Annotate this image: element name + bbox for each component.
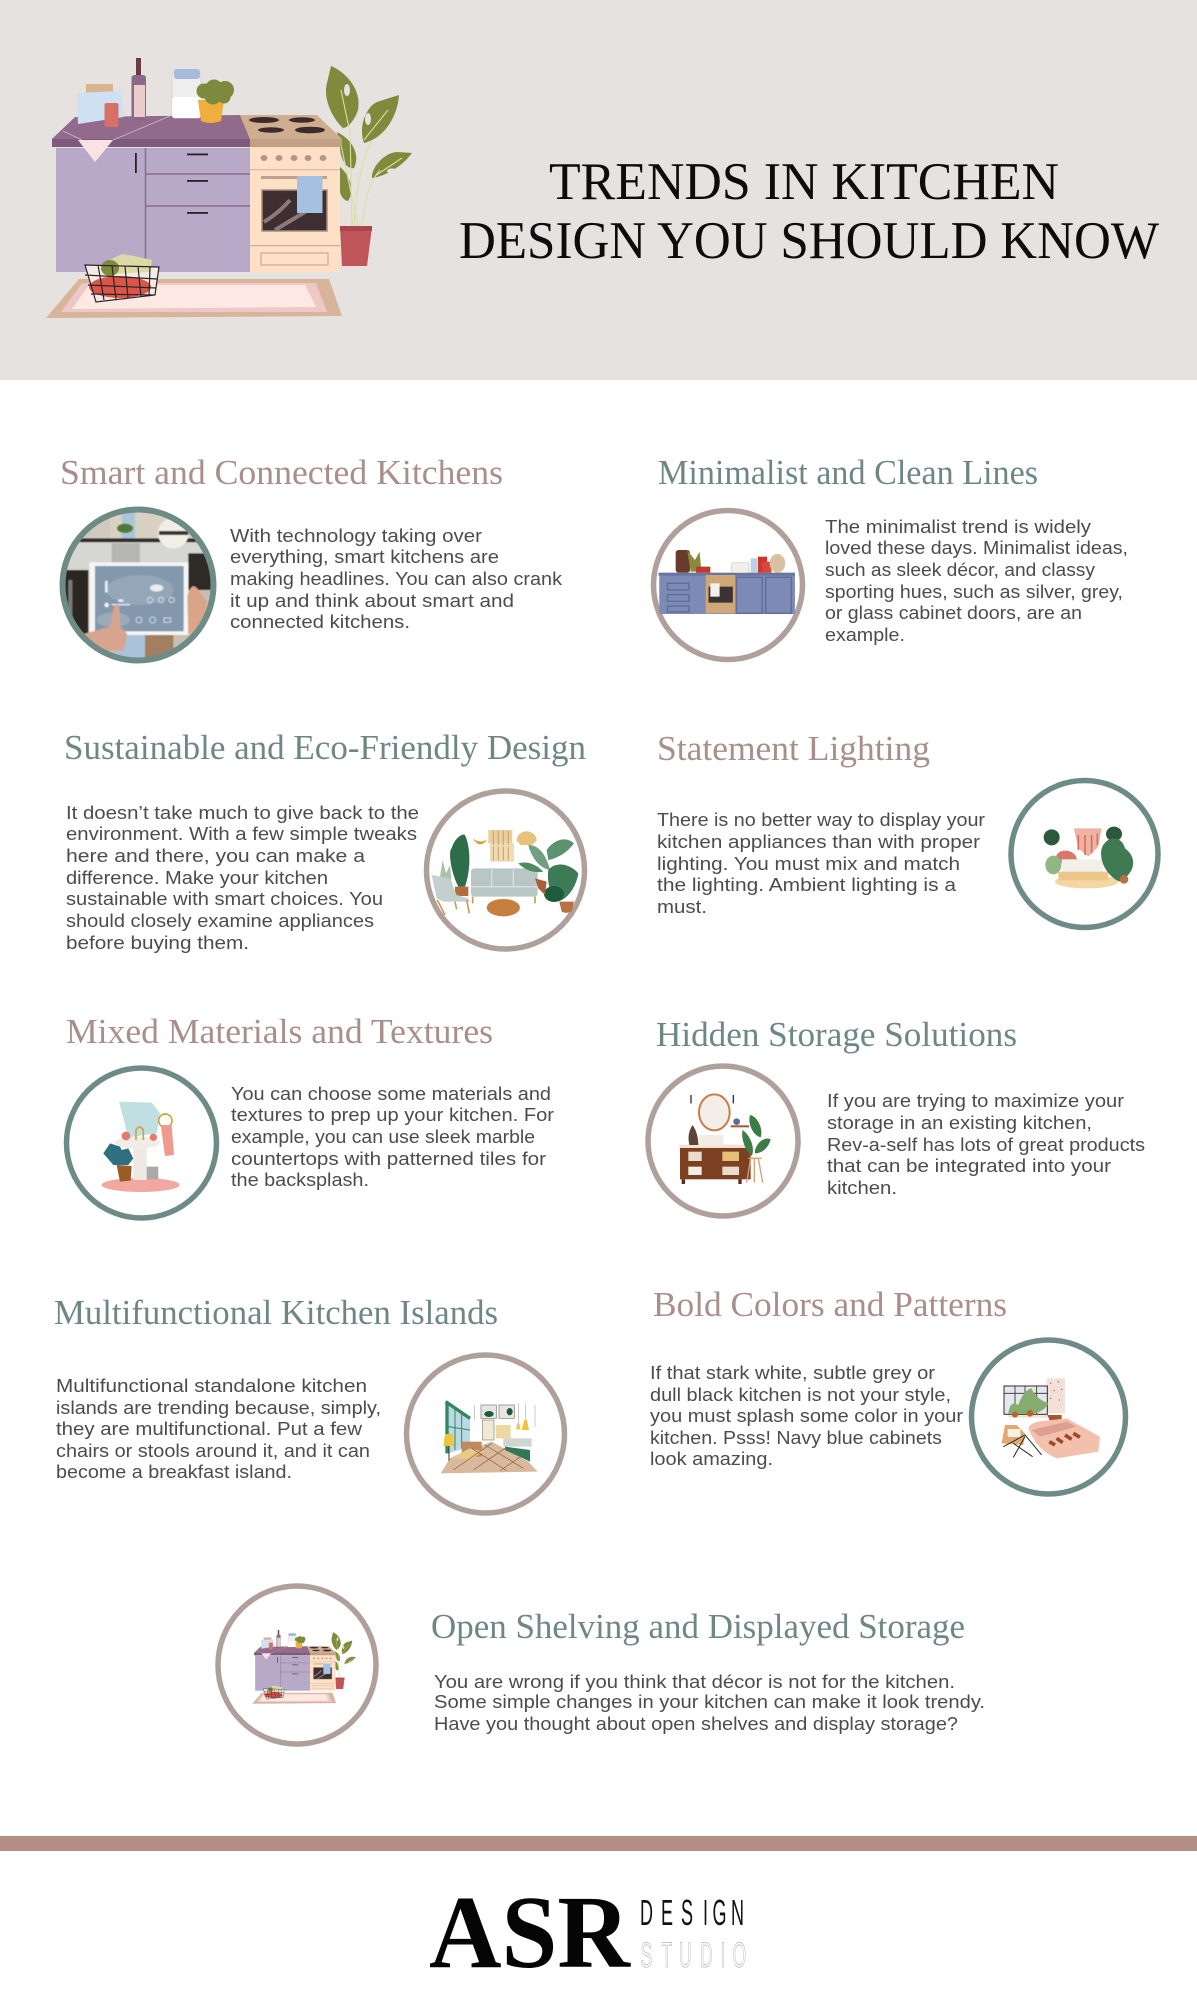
icon: tablet photo circle: [57, 503, 220, 667]
text block: kitchen.: [827, 1178, 897, 1198]
text block: become a breakfast island.: [56, 1462, 292, 1482]
text block: example, you can use sleek marble: [231, 1127, 535, 1147]
text block: countertops with patterned tiles for: [231, 1149, 546, 1169]
panel: hidden storage solutions: [648, 1015, 1145, 1216]
text block: environment. With a few simple tweaks: [66, 824, 417, 844]
icon: bedroom with plants circle: [1011, 780, 1158, 928]
text block: that can be integrated into your: [827, 1156, 1111, 1176]
text block: Have you thought about open shelves and display storage?: [434, 1714, 958, 1734]
text block: You are wrong if you think that décor is not for the kitchen.: [434, 1672, 955, 1692]
text block: If that stark white, subtle grey or: [650, 1363, 935, 1383]
panel: bold colors and patterns: [650, 1285, 1126, 1494]
text block: [230, 526, 563, 632]
panel: statement lighting: [657, 729, 1158, 928]
text block: everything, smart kitchens are: [230, 547, 499, 567]
text block: it up and think about smart and: [230, 591, 514, 611]
text block: If you are trying to maximize your: [827, 1091, 1124, 1111]
heading: Sustainable and Eco-Friendly Design: [64, 728, 586, 767]
heading: Smart and Connected Kitchens: [60, 453, 503, 492]
icon: blue kitchen circle: [654, 510, 802, 660]
heading: Statement Lighting: [657, 729, 930, 768]
text block: should closely examine appliances: [66, 911, 374, 931]
text block: connected kitchens.: [230, 612, 410, 632]
text block: the backsplash.: [231, 1170, 369, 1190]
text block: storage in an existing kitchen,: [827, 1113, 1092, 1133]
text block: kitchen appliances than with proper: [657, 832, 980, 852]
icon: wooden vanity circle: [648, 1066, 798, 1216]
icon: sink circle: [66, 1068, 216, 1218]
text block: difference. Make your kitchen: [66, 868, 328, 888]
icon: open-plan interior circle: [406, 1355, 564, 1513]
text block: sustainable with smart choices. You: [66, 889, 383, 909]
text block: Rev-a-self has lots of great products: [827, 1135, 1145, 1155]
text block: chairs or stools around it, and it can: [56, 1441, 370, 1461]
panel: minimalist and clean lines: [654, 453, 1128, 660]
text block: [231, 1084, 554, 1190]
panel: mixed materials and textures: [66, 1012, 554, 1218]
logo: STUDIO: [640, 1935, 746, 1975]
icon: kitchen illustration: [46, 58, 412, 318]
heading: Bold Colors and Patterns: [653, 1285, 1007, 1324]
text block: before buying them.: [66, 933, 249, 953]
header banner: [0, 0, 1197, 380]
text block: or glass cabinet doors, are an: [825, 603, 1082, 623]
text block: sporting hues, such as silver, grey,: [825, 582, 1123, 602]
text block: islands are trending because, simply,: [56, 1398, 381, 1418]
panel: open shelving and displayed storage: [218, 1586, 985, 1744]
text block: [825, 517, 1128, 645]
title: [459, 153, 1159, 270]
panel: sustainable and eco-friendly design: [64, 728, 586, 953]
text block: textures to prep up your kitchen. For: [231, 1105, 554, 1125]
text block: here and there, you can make a: [66, 846, 366, 866]
text block: kitchen. Psss! Navy blue cabinets: [650, 1428, 942, 1448]
panel: multifunctional kitchen islands: [54, 1293, 564, 1513]
logo: [429, 1875, 746, 1990]
logo: ASR: [429, 1875, 632, 1990]
heading: Mixed Materials and Textures: [66, 1012, 493, 1051]
text block: you must splash some color in your: [650, 1406, 963, 1426]
heading: Hidden Storage Solutions: [656, 1015, 1017, 1054]
text block: [66, 803, 419, 953]
icon: living room circle: [426, 791, 584, 949]
text block: [657, 810, 985, 917]
text block: look amazing.: [650, 1449, 773, 1469]
title: TRENDS IN KITCHEN: [549, 153, 1059, 211]
icon: kitchen thumbnail circle: [218, 1586, 376, 1744]
text block: There is no better way to display your: [657, 810, 985, 830]
heading: Multifunctional Kitchen Islands: [54, 1293, 498, 1332]
text block: example.: [825, 625, 905, 645]
text block: [56, 1376, 381, 1482]
text block: making headlines. You can also crank: [230, 569, 563, 589]
text block: [827, 1091, 1145, 1198]
text block: they are multifunctional. Put a few: [56, 1419, 363, 1439]
logo: DESIGN: [640, 1893, 744, 1934]
heading: Minimalist and Clean Lines: [658, 453, 1038, 492]
footer divider bar: [0, 1836, 1197, 1851]
text block: [650, 1363, 963, 1469]
text block: It doesn’t take much to give back to the: [66, 803, 419, 823]
text block: must.: [657, 897, 707, 917]
text block: loved these days. Minimalist ideas,: [825, 538, 1128, 558]
icon: pink bedroom circle: [972, 1340, 1126, 1494]
text block: With technology taking over: [230, 526, 482, 546]
text block: such as sleek décor, and classy: [825, 560, 1095, 580]
text block: The minimalist trend is widely: [825, 517, 1091, 537]
panel: smart and connected kitchens: [57, 453, 563, 667]
text block: You can choose some materials and: [231, 1084, 551, 1104]
text block: lighting. You must mix and match: [657, 854, 960, 874]
text block: the lighting. Ambient lighting is a: [657, 875, 957, 895]
text block: [434, 1672, 985, 1734]
text block: Some simple changes in your kitchen can make it look trendy.: [434, 1692, 985, 1712]
title: DESIGN YOU SHOULD KNOW: [459, 212, 1159, 270]
text block: dull black kitchen is not your style,: [650, 1385, 951, 1405]
text block: Multifunctional standalone kitchen: [56, 1376, 367, 1396]
heading: Open Shelving and Displayed Storage: [431, 1607, 965, 1646]
